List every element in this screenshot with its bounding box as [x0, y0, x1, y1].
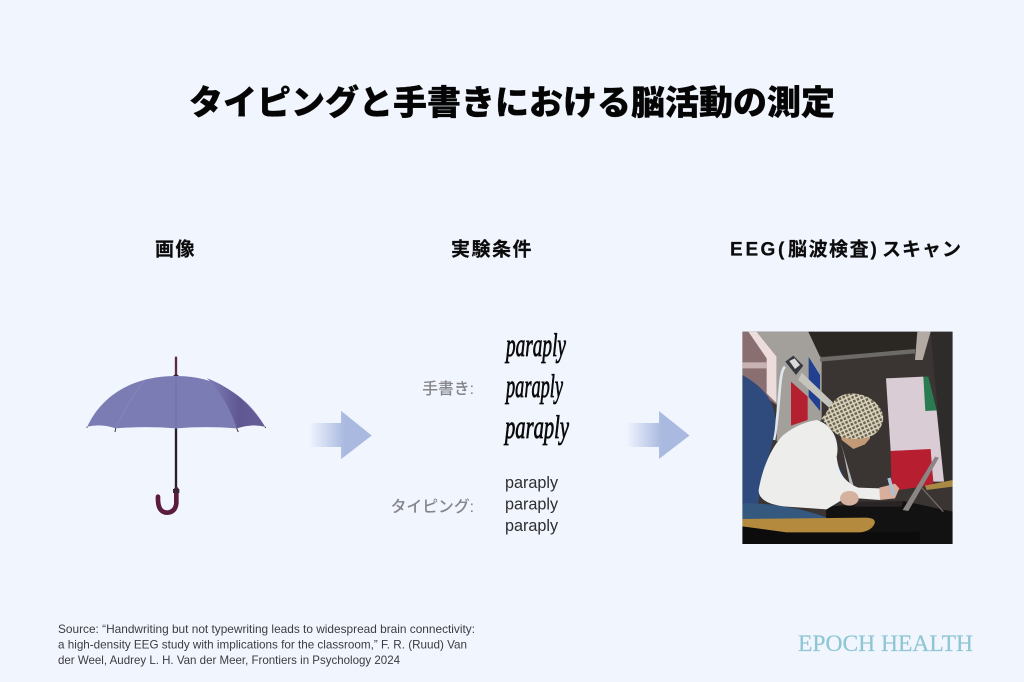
- heading: EEG scan: G: [760, 240, 777, 260]
- source citation: Source: “Handwriting but not typewriting leads to widespread brain connectivity:: [58, 622, 475, 636]
- source citation: [58, 622, 475, 667]
- source citation: a high-density EEG study with implications for the classroom,” F. R. (Ruud) Van: [58, 638, 467, 652]
- label: handwriting: 手書き:: [422, 380, 474, 398]
- heading: EEG scan: 脳: [788, 238, 809, 260]
- heading: EEG scan: ): [870, 240, 878, 260]
- heading: EEG scan: ス: [882, 240, 903, 260]
- typed samples: paraply: [505, 496, 559, 514]
- icon: umbrella: [87, 357, 266, 513]
- source citation: der Weel, Audrey L. H. Van der Meer, Frontiers in Psychology 2024: [58, 653, 400, 667]
- title: タイピングと手書きにおける脳活動の測定: [189, 84, 835, 122]
- heading: EEG scan: 波: [809, 238, 829, 260]
- handwritten samples: paraply: [505, 328, 566, 364]
- heading: experimental conditions: 実験条件: [451, 238, 533, 260]
- typed samples: paraply: [505, 517, 559, 535]
- handwritten samples: [504, 328, 569, 446]
- heading: EEG scan: (: [778, 240, 786, 260]
- handwritten samples: paraply: [505, 369, 563, 405]
- heading: EEG scan: 査: [850, 238, 870, 260]
- typed samples: [505, 474, 559, 535]
- arrow: image to conditions: [309, 411, 372, 459]
- heading: EEG scan: ャ: [922, 240, 943, 260]
- heading: EEG scan: キ: [902, 240, 923, 260]
- label: typing: タイピング:: [391, 498, 474, 516]
- photo: EEG scan participant writing on tablet: [742, 332, 953, 544]
- logo: Epoch Health: EPOCH HEALTH: [798, 631, 973, 656]
- arrow: conditions to EEG scan: [626, 411, 690, 459]
- typed samples: paraply: [505, 474, 559, 492]
- heading: image: 画像: [155, 238, 196, 260]
- heading: EEG scan: E: [746, 240, 760, 260]
- heading: EEG scan: 検: [829, 238, 850, 260]
- handwritten samples: paraply: [504, 410, 569, 446]
- heading: EEG scan: ン: [942, 240, 963, 260]
- heading: EEG scan: E: [730, 240, 744, 260]
